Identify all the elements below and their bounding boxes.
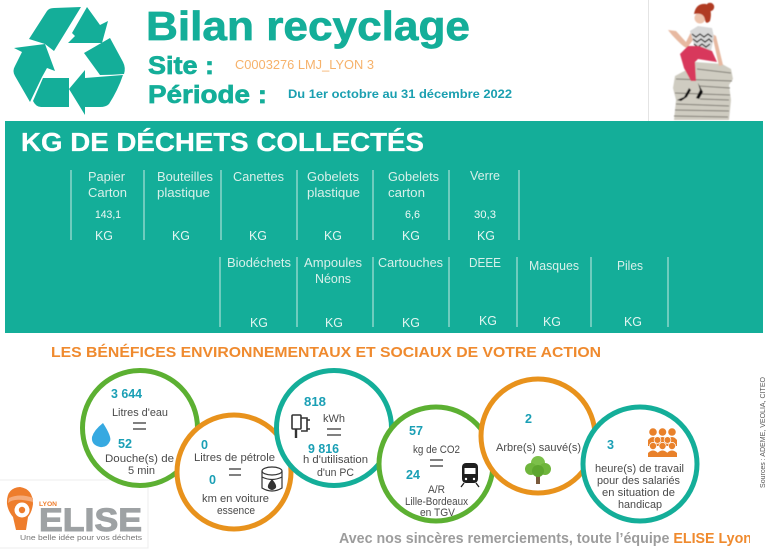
column: gobelets plastique: KG (324, 228, 342, 243)
logo: ELISE Lyon: LYON (39, 501, 57, 508)
circle: pétrole: essence (217, 505, 255, 517)
column: gobelets carton: carton (388, 185, 425, 200)
column: bouteilles plastique: KG (172, 228, 190, 243)
column: deee (469, 255, 501, 328)
circle: CO2: Lille-Bordeaux (405, 496, 468, 508)
icon: group of people (648, 428, 677, 457)
circle: eau: 3 644 (111, 386, 143, 401)
column: gobelets plastique: Gobelets (307, 169, 359, 184)
circle: heures de travail (583, 407, 697, 521)
heading: kg de déchets collectés: KG DE DÉCHETS COLLECTÉS (21, 127, 424, 157)
column: verre: KG (477, 228, 495, 243)
column: biodéchets: Biodéchets (227, 255, 291, 270)
circle: arbres: Arbre(s) sauvé(s) (496, 442, 581, 454)
icon: train (461, 463, 479, 487)
column: ampoules néons (304, 255, 362, 330)
column: cartouches: KG (402, 315, 420, 330)
column: papier carton: 143,1 (95, 209, 121, 221)
circle: eau: Douche(s) de (105, 453, 174, 465)
column: deee: KG (479, 313, 497, 328)
circle: arbres (481, 379, 595, 493)
column: ampoules néons: Ampoules (304, 255, 362, 270)
circle: pétrole: Litres de pétrole (194, 452, 275, 464)
icon: recycling symbol (14, 7, 125, 115)
icon: water drop (92, 423, 110, 447)
period label: Période : (148, 81, 267, 109)
column: verre: Verre (470, 168, 500, 183)
column: piles (617, 258, 643, 329)
panel: kg de déchets collectés (5, 121, 763, 333)
sources note: Sources : ADEME, VEOLIA, CITEO (758, 377, 767, 488)
circle: CO2: 57 (409, 423, 423, 438)
circle: kWh: kWh (323, 413, 345, 425)
circle: CO2: A/R (428, 484, 445, 496)
circle: eau: Litres d'eau (112, 407, 168, 419)
column: papier carton: Carton (88, 185, 127, 200)
column: cartouches: Cartouches (378, 255, 443, 270)
column: verre (470, 168, 500, 243)
circle: pétrole: 0 (209, 472, 216, 487)
column: gobelets carton: KG (402, 228, 420, 243)
circle: CO2: en TGV (420, 507, 456, 519)
icon: plug (292, 415, 310, 438)
column: bouteilles plastique (157, 169, 213, 243)
logo: ELISE Lyon: Une belle idée pour vos déchets (20, 535, 143, 542)
circle: heures de travail: pour des salariés (597, 475, 680, 487)
circle: kWh: 9 816 (308, 441, 339, 456)
circle: heures de travail: heure(s) de travail (595, 463, 684, 475)
column: bouteilles plastique: plastique (157, 185, 210, 200)
column: gobelets carton: Gobelets (388, 169, 439, 184)
column: papier carton (88, 169, 127, 243)
site label: Site : (148, 52, 214, 80)
circle: pétrole (177, 415, 291, 529)
circle: heures de travail: en situation de (602, 487, 675, 499)
logo: ELISE Lyon: ELISE (39, 502, 142, 538)
column: biodéchets (227, 255, 291, 330)
icon: tree (525, 456, 551, 484)
logo: ELISE Lyon (0, 480, 148, 548)
circle: kWh: 818 (304, 394, 326, 409)
icon: orange bulb (7, 487, 33, 530)
column: biodéchets: KG (250, 315, 268, 330)
circle: pétrole: km en voiture (202, 493, 269, 505)
circle: arbres: 2 (525, 411, 532, 426)
column: piles: KG (624, 314, 642, 329)
column: deee: DEEE (469, 255, 501, 270)
column: ampoules néons: KG (325, 315, 343, 330)
icon: oil barrel (262, 467, 282, 491)
column: canettes: Canettes (233, 169, 284, 184)
column: bouteilles plastique: Bouteilles (157, 169, 213, 184)
circle: heures de travail: 3 (607, 437, 614, 452)
column: gobelets plastique (307, 169, 360, 243)
footer thank-you message: Avec nos sincères remerciements, toute l’équipe ELISE Lyon (339, 531, 752, 547)
column: papier carton: KG (95, 228, 113, 243)
site value: C0003276 LMJ_LYON 3 (235, 58, 374, 72)
circle: eau: 52 (118, 436, 132, 451)
column: gobelets carton: 6,6 (405, 209, 420, 221)
column: masques: KG (543, 314, 561, 329)
circle: kWh (276, 370, 392, 486)
circle: kWh: h d'utilisation (303, 454, 368, 466)
column: ampoules néons: Néons (315, 271, 351, 286)
column: canettes (233, 169, 284, 243)
column: gobelets carton (388, 169, 439, 243)
column: piles: Piles (617, 258, 643, 273)
column: papier carton: Papier (88, 169, 126, 184)
heading: bénéfices environnementaux et sociaux: LES BÉNÉFICES ENVIRONNEMENTAUX ET SOCIAUX DE VOTRE ACTION (51, 344, 601, 361)
circle: kWh: d'un PC (317, 467, 354, 479)
circle: CO2: 24 (406, 467, 421, 482)
column: verre: 30,3 (474, 209, 496, 221)
column: gobelets plastique: plastique (307, 185, 360, 200)
circle: CO2: kg de CO2 (413, 444, 460, 456)
column: cartouches (378, 255, 443, 330)
circle: eau: 5 min (128, 465, 155, 477)
circle: pétrole: 0 (201, 437, 208, 452)
column: masques (529, 258, 579, 329)
column: masques: Masques (529, 258, 579, 273)
circle: eau (82, 370, 198, 486)
period value: Du 1er octobre au 31 décembre 2022 (288, 87, 512, 101)
illustration: woman sitting on a paper stack (668, 3, 733, 120)
title: Bilan recyclage (146, 3, 470, 49)
circle: heures de travail: handicap (618, 499, 662, 511)
circle: CO2 (379, 407, 493, 521)
column: canettes: KG (249, 228, 267, 243)
